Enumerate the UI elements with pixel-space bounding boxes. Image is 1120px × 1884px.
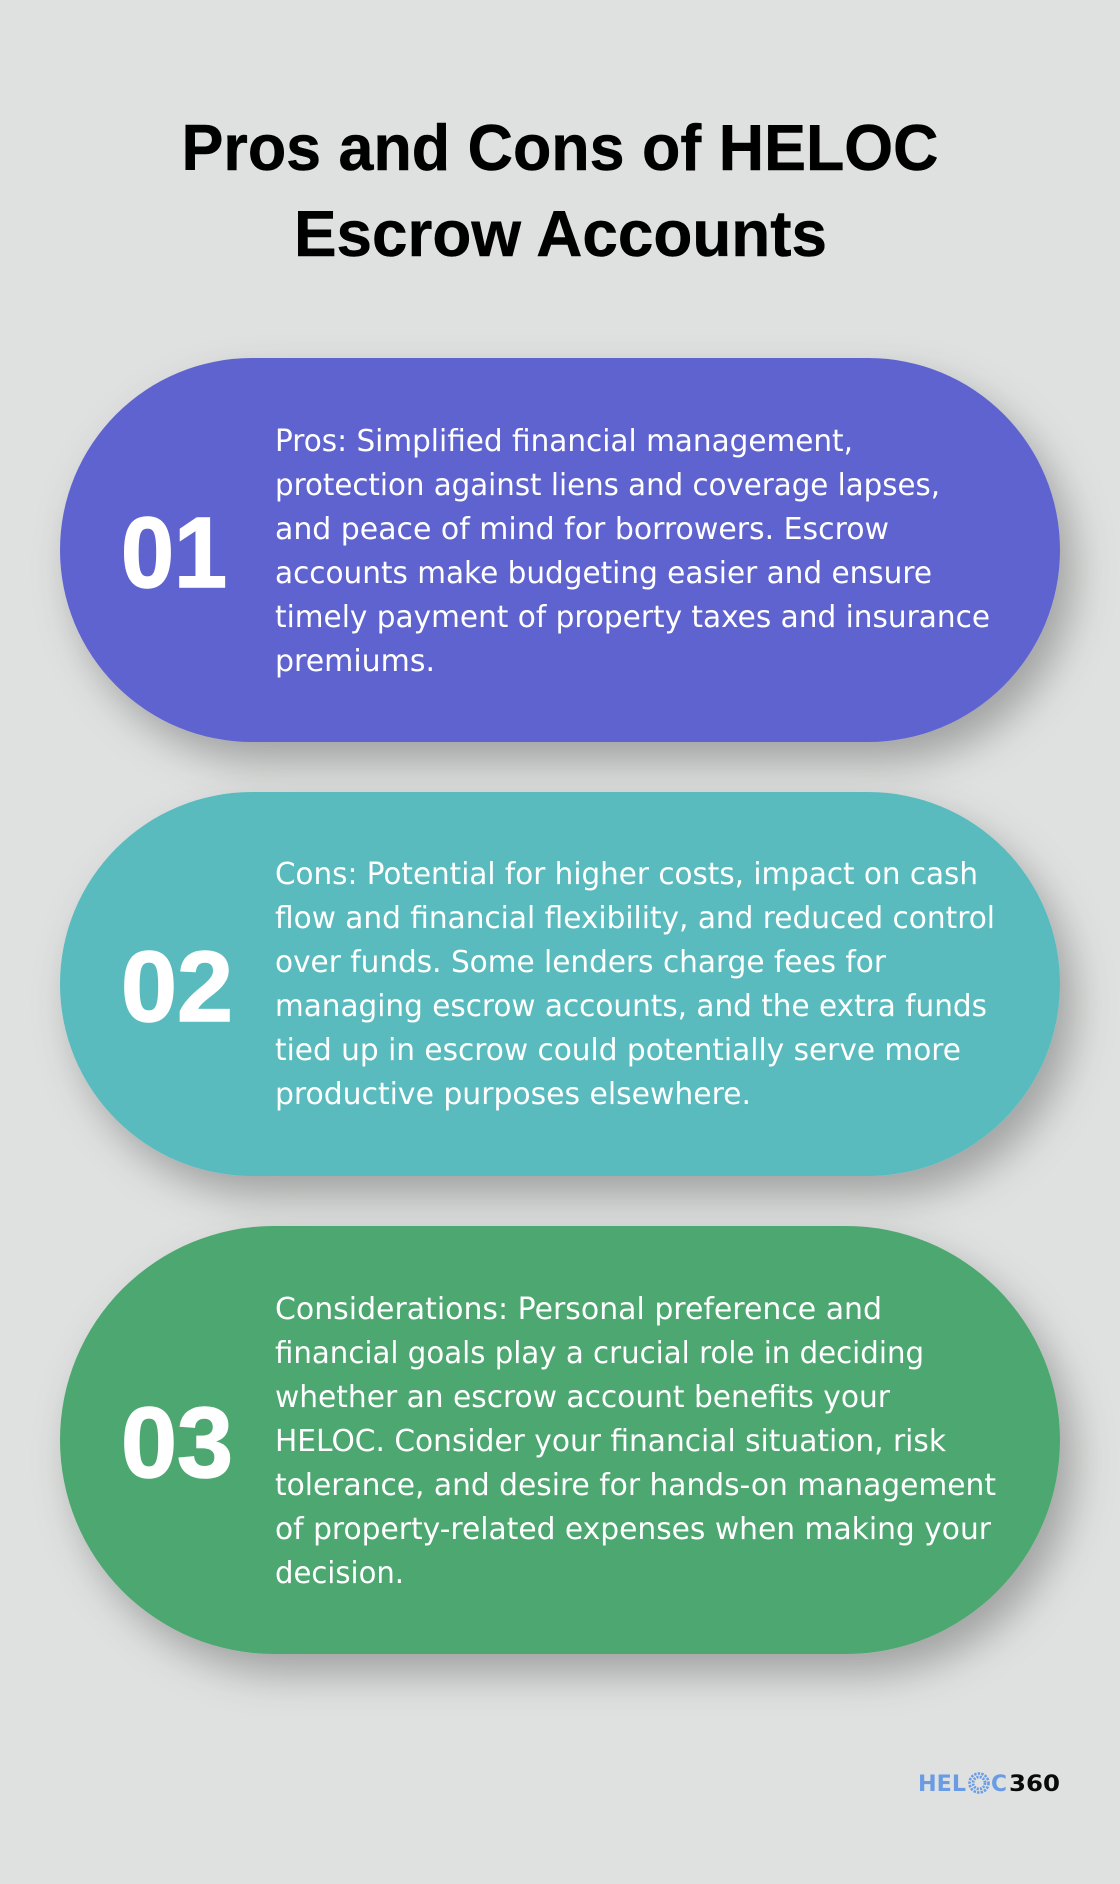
text block: cons: managing escrow accounts, and the extra funds <box>275 989 987 1024</box>
text block: cons: productive purposes elsewhere. <box>275 1077 751 1112</box>
title <box>182 111 938 270</box>
number 01: 01 <box>121 497 227 609</box>
text block: considerations: tolerance, and desire for hands-on management <box>275 1468 996 1503</box>
text block: pros: and peace of mind for borrowers. Escrow <box>275 512 889 547</box>
text block: pros: Pros: Simplified financial management, <box>275 424 853 459</box>
panel: pros <box>60 358 1060 742</box>
text block: cons: tied up in escrow could potentially serve more <box>275 1033 961 1068</box>
logo: HELOC360: HEL <box>918 1772 966 1797</box>
text block: cons: Cons: Potential for higher costs, impact on cash <box>275 857 978 892</box>
text block: considerations: financial goals play a crucial role in deciding <box>275 1336 924 1371</box>
panel: considerations <box>60 1226 1060 1654</box>
title: Pros and Cons of HELOC <box>182 111 938 184</box>
text block: considerations: whether an escrow account benefits your <box>275 1380 890 1415</box>
logo: HELOC360: C <box>991 1772 1007 1797</box>
text block: considerations: HELOC. Consider your financial situation, risk <box>275 1424 946 1459</box>
logo: HELOC360: 360 <box>1009 1772 1060 1797</box>
text block: considerations: decision. <box>275 1556 404 1591</box>
text block: pros: premiums. <box>275 644 435 679</box>
text block: pros: accounts make budgeting easier and ensure <box>275 556 932 591</box>
panel: cons <box>60 792 1060 1176</box>
text block: considerations: of property-related expenses when making your <box>275 1512 991 1547</box>
number 02: 02 <box>121 931 233 1043</box>
text block: pros: timely payment of property taxes and insurance <box>275 600 990 635</box>
text block: cons: over funds. Some lenders charge fees for <box>275 945 886 980</box>
text block: considerations <box>275 1292 996 1591</box>
text block: pros <box>275 424 990 679</box>
number 03: 03 <box>121 1387 233 1499</box>
text block: considerations: Considerations: Personal preference and <box>275 1292 882 1327</box>
logo: HELOC360 <box>918 1772 1060 1797</box>
text block: pros: protection against liens and coverage lapses, <box>275 468 940 503</box>
text block: cons: flow and financial flexibility, and reduced control <box>275 901 995 936</box>
title: Escrow Accounts <box>294 197 827 270</box>
icon: swirl O <box>970 1774 988 1792</box>
text block: cons <box>275 857 995 1112</box>
